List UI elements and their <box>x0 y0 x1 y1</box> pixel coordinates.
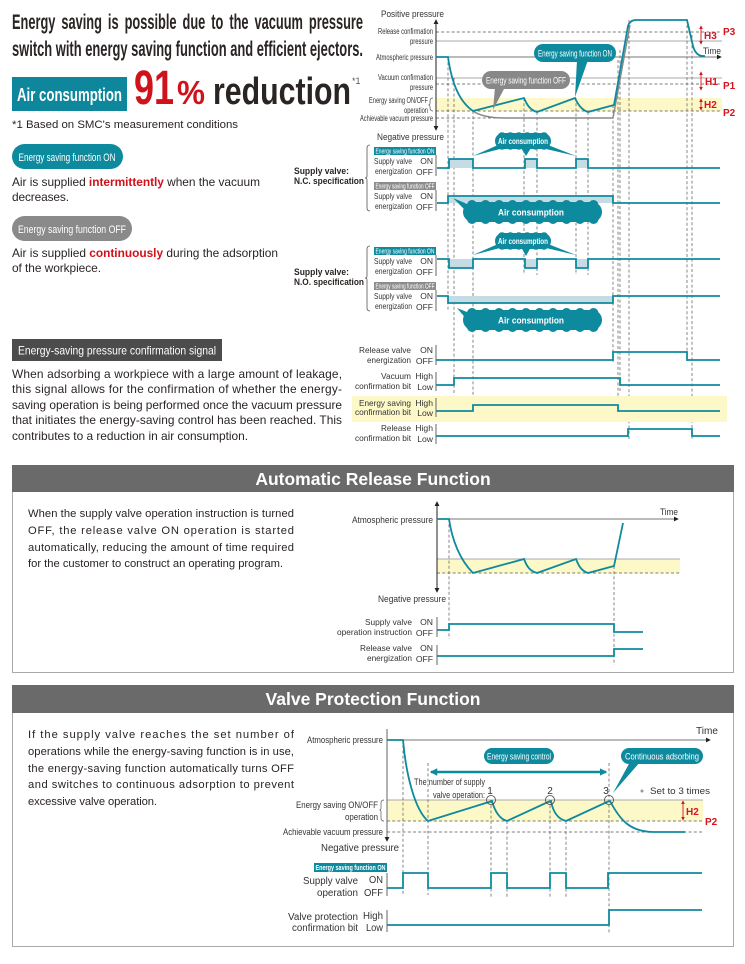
chart: valve protection pressure and signals: Energy saving function ON <box>316 863 386 872</box>
chart: valve protection pressure and signals: Negative pressure <box>321 843 399 854</box>
signal chart: confirmation bits: High <box>415 371 433 381</box>
cloud callout: air consumption, N.O. off: Air consumption <box>498 316 564 326</box>
pressure chart: P2 <box>723 108 736 119</box>
panel: energy saving off description: Air is supplied continuously during the adsorption <box>12 246 278 260</box>
chart: valve protection pressure and signals: Valve protection <box>288 912 358 923</box>
panel: energy saving off description: of the workpiece. <box>12 261 101 275</box>
callout: continuous adsorbing: Continuous adsorbing <box>625 752 699 762</box>
pressure chart: P3 <box>723 27 736 38</box>
supply valve N.C. specification: OFF <box>416 202 433 212</box>
callout: energy saving control: Energy saving control <box>487 752 551 762</box>
signal chart: confirmation bits: High <box>415 423 433 433</box>
cloud callout: air consumption, N.C. on: Air consumption <box>498 136 548 146</box>
supply valve N.O. specification: N.O. specification <box>294 277 364 287</box>
signal chart: confirmation bits: confirmation bit <box>355 381 412 391</box>
footnote: *1 Based on SMC's measurement conditions <box>12 119 239 131</box>
pressure chart: P1 <box>723 81 736 92</box>
supply valve N.C. specification: energization <box>375 166 412 176</box>
chart: valve protection pressure and signals: H2 <box>686 807 699 818</box>
signal chart: confirmation bits: energization <box>367 355 411 365</box>
text block: valve protection description <box>28 729 295 808</box>
signal chart: confirmation bits: Vacuum <box>381 371 411 381</box>
text block: signal description: this signal allows for the confirmation of whether the energy- <box>12 382 342 396</box>
chart: valve protection pressure and signals: P2 <box>705 817 718 828</box>
chart: automatic release pressure and signals: OFF <box>416 654 433 664</box>
supply valve N.O. specification: Supply valve <box>374 291 412 301</box>
supply valve N.C. specification: Energy saving function OFF <box>376 184 434 190</box>
text block: valve protection description: operations while the energy-saving function is in use, <box>28 746 294 758</box>
panel: valve protection function <box>12 685 734 946</box>
supply valve N.O. specification: OFF <box>416 267 433 277</box>
supply valve N.C. specification: Energy saving function ON <box>376 148 434 156</box>
chart: automatic release pressure and signals: energization <box>367 653 412 663</box>
signal chart: confirmation bits: Low <box>417 382 434 392</box>
title: switch with energy saving function and efficient ejectors. <box>12 38 363 61</box>
text block: signal description: that initiates the energy-saving control has been reached. This <box>12 413 342 427</box>
signal chart: confirmation bits: Low <box>417 408 434 418</box>
cloud callout: air consumption, N.O. on: Air consumption <box>498 236 548 246</box>
supply valve N.C. specification: N.C. specification <box>294 176 364 186</box>
chart: valve protection pressure and signals: operation <box>317 888 358 899</box>
panel: automatic release function <box>12 465 734 672</box>
pressure chart: H3 <box>704 31 717 42</box>
headline: air consumption reduction: *1 <box>352 76 361 86</box>
text block: signal description: saving operation is being performed once the vacuum pressure <box>12 398 342 412</box>
chart: valve protection pressure and signals: The number of supply <box>414 777 485 788</box>
callout: energy saving function off <box>482 71 570 110</box>
chart: valve protection pressure and signals: Achievable vacuum pressure <box>283 827 383 838</box>
chart: automatic release pressure and signals: ON <box>420 643 433 653</box>
chart: valve protection pressure and signals: Atmospheric pressure <box>307 735 383 746</box>
signal chart: confirmation bits: OFF <box>416 356 433 366</box>
pressure chart: Positive pressure <box>381 9 444 20</box>
pressure chart: pressure <box>410 83 433 92</box>
chart: valve protection pressure and signals: Energy saving ON/OFF <box>296 800 378 811</box>
cloud callout: air consumption, N.C. on <box>473 133 576 156</box>
supply valve N.O. specification: ON <box>420 291 433 301</box>
pressure chart: Release confirmation <box>378 27 433 36</box>
chart: valve protection pressure and signals: Low <box>366 923 384 934</box>
headline: air consumption reduction: Air consumption <box>17 85 122 105</box>
chart: valve protection pressure and signals: ON <box>369 875 383 886</box>
signal chart: confirmation bits <box>352 345 727 444</box>
chart: valve protection pressure and signals: High <box>363 911 383 922</box>
supply valve N.C. specification: ON <box>420 156 433 166</box>
cloud callout: air consumption, N.O. off <box>457 308 602 330</box>
text block: valve protection description: the energy-saving function automatically turns OFF <box>28 763 294 775</box>
headline: air consumption reduction: % <box>177 74 205 111</box>
supply valve N.O. specification: ON <box>420 256 433 266</box>
pressure chart: operation <box>404 106 428 115</box>
text block: automatic release description: automatically, reducing the amount of time required <box>28 542 294 554</box>
chart: valve protection pressure and signals: Set to 3 times <box>650 786 710 797</box>
panel: energy saving on description: Air is supplied intermittently when the vacuum <box>12 175 260 189</box>
text block: automatic release description <box>28 508 294 570</box>
text block: signal description: When adsorbing a workpiece with a large amount of leakage, <box>12 367 342 381</box>
supply valve N.O. specification: OFF <box>416 302 433 312</box>
chart: valve protection pressure and signals: 1 <box>487 786 493 797</box>
text block: valve protection description: excessive valve operation. <box>28 796 157 808</box>
pressure chart: H1 <box>705 77 718 88</box>
supply valve N.O. specification: energization <box>375 266 412 276</box>
cloud callout: air consumption, N.O. on <box>473 233 576 256</box>
heading: energy-saving pressure confirmation signal: Energy-saving pressure confirmation signal <box>18 344 216 358</box>
chart: valve protection pressure and signals: Supply valve <box>303 876 358 887</box>
callout: energy saving function on: Energy saving function ON <box>538 48 612 58</box>
text block: signal description: contributes to a reduction in air consumption. <box>12 429 248 443</box>
panel: energy saving on description <box>12 144 260 204</box>
title: Energy saving is possible due to the vacuum pressure <box>12 11 363 34</box>
chart: valve protection pressure and signals: operation <box>345 812 378 823</box>
chart: automatic release pressure and signals: operation instruction <box>337 627 412 637</box>
title <box>12 11 363 61</box>
heading: valve protection function: Valve Protection Function <box>266 689 480 709</box>
cloud callout: air consumption, N.C. off <box>453 198 602 222</box>
signal chart: confirmation bits: Release <box>381 423 411 433</box>
supply valve N.O. specification: Supply valve <box>374 256 412 266</box>
pressure chart: Atmospheric pressure <box>376 53 433 62</box>
supply valve N.O. specification: energization <box>375 301 412 311</box>
chart: automatic release pressure and signals: Time <box>660 507 678 518</box>
chart: valve protection pressure and signals <box>283 725 718 934</box>
pressure chart: Negative pressure <box>377 132 444 143</box>
supply valve N.C. specification <box>294 145 720 212</box>
headline: air consumption reduction <box>12 62 361 115</box>
heading: energy-saving pressure confirmation signal <box>12 339 222 361</box>
chart: valve protection pressure and signals: valve operation: <box>433 790 485 801</box>
panel: energy saving off description <box>12 216 278 275</box>
chart: valve protection pressure and signals: 2 <box>547 786 553 797</box>
chart: automatic release pressure and signals: OFF <box>416 628 433 638</box>
signal chart: confirmation bits: Release valve <box>359 345 411 355</box>
supply valve N.C. specification: ON <box>420 191 433 201</box>
pressure chart: H2 <box>704 100 717 111</box>
chart: automatic release pressure and signals: ON <box>420 617 433 627</box>
text block: valve protection description: and switches to continuous adsorption to prevent <box>28 779 295 791</box>
signal chart: confirmation bits: Energy saving <box>359 398 411 408</box>
headline: air consumption reduction: reduction <box>213 71 351 113</box>
callout: energy saving control <box>484 748 554 764</box>
pressure chart: Vacuum confirmation <box>378 73 433 82</box>
chart: automatic release pressure and signals <box>337 502 680 665</box>
pressure chart: Energy saving ON/OFF <box>369 96 428 105</box>
supply valve N.C. specification: Supply valve <box>374 191 412 201</box>
signal chart: confirmation bits: Low <box>417 434 434 444</box>
supply valve N.C. specification: energization <box>375 201 412 211</box>
supply valve N.C. specification: Supply valve: <box>294 166 349 176</box>
pressure chart <box>360 9 736 440</box>
text block: signal description <box>12 367 342 443</box>
pressure chart: Time <box>703 46 721 56</box>
text block: automatic release description: When the supply valve operation instruction is turned <box>28 508 294 520</box>
callout: energy saving function on <box>534 44 616 97</box>
signal chart: confirmation bits: confirmation bit <box>355 433 412 443</box>
chart: automatic release pressure and signals: Supply valve <box>365 617 412 627</box>
panel: energy saving off description: Energy saving function OFF <box>18 224 126 236</box>
chart: valve protection pressure and signals: 3 <box>603 786 609 797</box>
text block: automatic release description: OFF, the release valve ON operation is started <box>28 525 294 537</box>
callout: continuous adsorbing <box>613 748 703 793</box>
cloud callout: air consumption, N.C. off: Air consumption <box>498 208 564 218</box>
text block: valve protection description: If the supply valve reaches the set number of <box>28 729 295 741</box>
headline: air consumption reduction: 91 <box>134 62 174 115</box>
panel: energy saving on description: decreases. <box>12 190 69 204</box>
callout: energy saving function off: Energy saving function OFF <box>486 76 566 86</box>
heading: automatic release function: Automatic Release Function <box>255 469 491 489</box>
text block: automatic release description: for the customer to construct an operating program. <box>28 558 283 570</box>
supply valve N.C. specification: OFF <box>416 167 433 177</box>
signal chart: confirmation bits: confirmation bit <box>355 407 412 417</box>
supply valve N.O. specification <box>294 246 720 312</box>
supply valve N.C. specification: Supply valve <box>374 156 412 166</box>
signal chart: confirmation bits: ON <box>420 345 433 355</box>
signal chart: confirmation bits: High <box>415 398 433 408</box>
panel: energy saving on description: Energy saving function ON <box>18 152 116 164</box>
supply valve N.O. specification: Energy saving function OFF <box>376 284 434 290</box>
supply valve N.O. specification: Supply valve: <box>294 267 349 277</box>
chart: valve protection pressure and signals: confirmation bit <box>292 923 358 934</box>
chart: automatic release pressure and signals: Atmospheric pressure <box>352 515 433 526</box>
pressure chart: Achievable vacuum pressure <box>360 114 433 123</box>
pressure chart: pressure <box>410 37 433 46</box>
chart: valve protection pressure and signals: OFF <box>364 888 383 899</box>
chart: automatic release pressure and signals: Release valve <box>360 643 412 653</box>
chart: valve protection pressure and signals: Time <box>696 725 718 737</box>
supply valve N.O. specification: Energy saving function ON <box>376 248 434 256</box>
chart: automatic release pressure and signals: Negative pressure <box>378 594 446 605</box>
